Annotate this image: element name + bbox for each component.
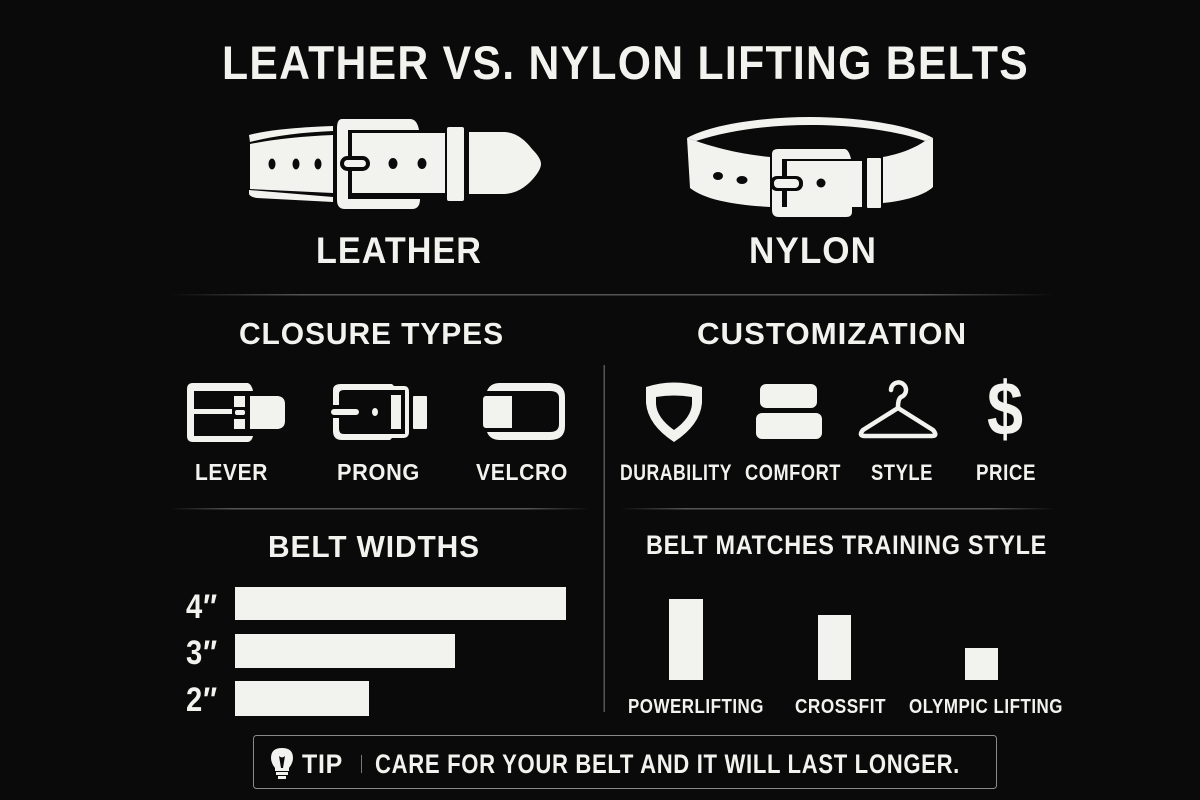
label: velcro: VELCRO	[476, 459, 568, 485]
label: lever: LEVER	[195, 459, 268, 485]
icon: leather belt	[249, 119, 541, 209]
heading: customization: CUSTOMIZATION	[697, 316, 967, 351]
icon: dollar sign: $	[987, 367, 1025, 452]
label: nylon: NYLON	[749, 230, 877, 271]
icon: prong buckle	[331, 384, 427, 440]
bar chart: belt widths	[186, 587, 566, 719]
icon: nylon belt	[687, 117, 933, 217]
bar: olympic lifting	[909, 648, 1063, 718]
bar: crossfit: CROSSFIT	[795, 696, 886, 718]
bar: 2 inch: 2″	[186, 681, 218, 719]
heading: belt widths: BELT WIDTHS	[268, 529, 480, 564]
icon: shield	[646, 382, 702, 442]
label: tip: TIP	[302, 749, 343, 779]
label: comfort: COMFORT	[745, 460, 841, 485]
label: leather: LEATHER	[316, 230, 482, 271]
icon: light bulb	[271, 748, 293, 779]
bar: powerlifting	[628, 599, 764, 718]
label: style: STYLE	[871, 460, 933, 485]
bar: 4 inch: 4″	[186, 588, 218, 626]
icon: velcro strap	[483, 383, 565, 440]
label: durability: DURABILITY	[620, 460, 732, 485]
bar: powerlifting: POWERLIFTING	[628, 696, 764, 718]
icon: comfort cushions	[756, 384, 822, 439]
label: prong: PRONG	[337, 459, 420, 485]
bar chart: training style	[628, 599, 1063, 718]
bar: 4 inch	[186, 587, 566, 626]
bar: 3 inch: 3″	[186, 634, 218, 672]
label: price: PRICE	[976, 460, 1036, 485]
icon: lever buckle	[187, 383, 285, 442]
bar: crossfit	[795, 615, 886, 718]
callout: tip	[254, 736, 996, 788]
tip text: CARE FOR YOUR BELT AND IT WILL LAST LONGER.	[375, 749, 960, 779]
bar: 3 inch	[186, 634, 455, 672]
heading: belt matches training style: BELT MATCHES TRAINING STYLE	[646, 530, 1047, 560]
bar: olympic lifting: OLYMPIC LIFTING	[909, 696, 1063, 718]
icon: hanger	[861, 382, 935, 436]
bar: 2 inch	[186, 681, 369, 719]
heading: closure types: CLOSURE TYPES	[239, 316, 504, 351]
title: LEATHER VS. NYLON LIFTING BELTS	[222, 36, 1029, 89]
